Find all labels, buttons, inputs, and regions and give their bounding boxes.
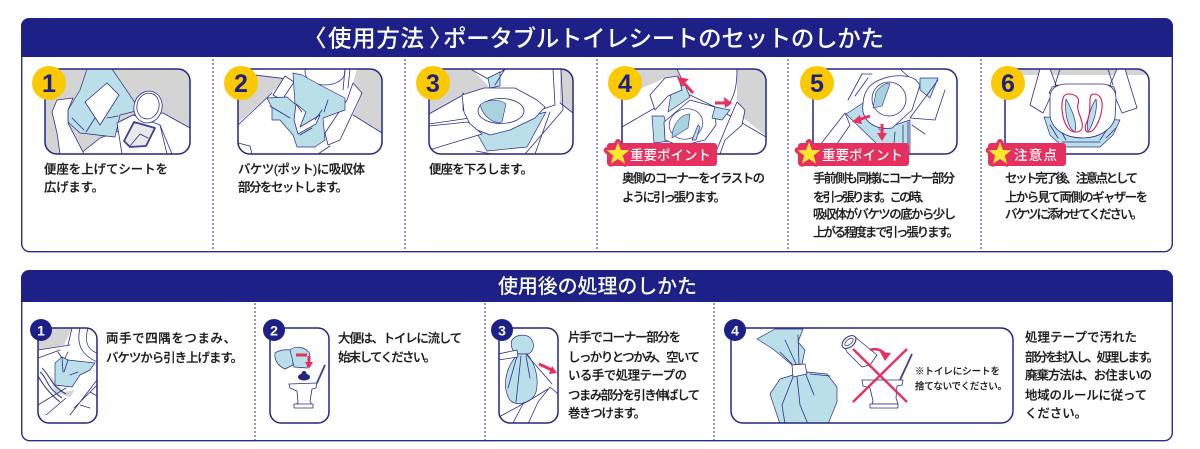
icon: red cross <box>853 349 907 402</box>
illustration: raising seat and spreading sheet <box>45 69 190 154</box>
heading bar: how to set the sheet: 使用方法 <box>328 26 424 52</box>
panel: disposal after use <box>21 270 1173 441</box>
callout: important point <box>607 142 717 166</box>
number badge 3: 3 <box>498 322 506 338</box>
callout: caution <box>988 142 1066 166</box>
heading bar: how to set the sheet: 〈 <box>303 26 326 52</box>
number badge 1 <box>30 319 52 341</box>
text: step 5: 上がる程度まで引っ張ります。 <box>813 224 959 240</box>
heading bar: disposal after use <box>21 270 1173 302</box>
heading bar: how to set the sheet: ポータブルトイレシートのセットのしかた <box>443 24 884 52</box>
text: step 3: 便座を下ろします。 <box>429 162 533 176</box>
number badge 4: 4 <box>731 322 739 338</box>
disposal step 3 <box>491 319 700 424</box>
step 3 <box>416 66 573 176</box>
disposal step 1 <box>30 319 243 423</box>
callout: important point <box>798 142 909 166</box>
text: step 5: を引っ張ります。この時、 <box>813 190 931 204</box>
panel: how to set the sheet <box>21 18 1173 252</box>
icon: sheet roll <box>840 333 891 367</box>
text: disposal step 3: 片手でコーナー部分を <box>568 330 681 344</box>
illustration: lifting sheet from bucket <box>38 328 97 423</box>
text: step 4: ように引っ張ります。 <box>622 190 726 204</box>
text: disposal step 4: ください。 <box>1025 406 1087 420</box>
number badge 3 <box>491 319 513 341</box>
text: disposal step 3: 巻きつけます。 <box>568 406 646 420</box>
text: disposal step 4: 廃棄方法は、お住まいの <box>1025 368 1152 382</box>
number badge 2 <box>224 66 258 100</box>
text: disposal step 2: 大便は、トイレに流して <box>338 332 462 346</box>
text: disposal step 1: バケツから引き上げます。 <box>106 351 243 365</box>
disposal step 4 <box>724 319 1159 424</box>
number badge 1 <box>32 66 66 100</box>
text: step 1: 便座を上げてシートを <box>44 162 168 176</box>
disposal step 2 <box>263 319 462 423</box>
callout: important point: 重要ポイント <box>630 148 711 163</box>
text: step 4: 奥側のコーナーをイラストの <box>622 170 765 186</box>
number badge 6: 6 <box>1001 70 1015 98</box>
number badge 3 <box>416 66 450 100</box>
note: do not flush sheet <box>915 366 1007 392</box>
text: disposal step 4 <box>1025 330 1159 420</box>
text: step 6: バケツに添わせてください。 <box>1005 208 1143 222</box>
number badge 1: 1 <box>42 70 56 98</box>
callout: important point: 重要ポイント <box>822 148 903 163</box>
text: step 1: 広げます。 <box>44 180 104 194</box>
icon: toilet <box>862 354 912 408</box>
text: disposal step 2 <box>338 332 462 364</box>
text: step 5 <box>813 170 959 240</box>
illustration: checking gathers from above <box>1005 69 1150 154</box>
number badge 2 <box>263 319 285 341</box>
text: step 6: セット完了後、注意点として <box>1005 170 1138 186</box>
illustration: pulling the far corners <box>622 69 766 154</box>
text: step 5: 手前側も同様にコーナー部分 <box>813 170 956 186</box>
number badge 4: 4 <box>618 70 632 98</box>
heading bar: disposal after use: 使用後の処理のしかた <box>498 275 697 298</box>
heading bar: how to set the sheet <box>21 18 1173 57</box>
illustration: setting absorbent in bucket <box>238 59 382 154</box>
illustration: wrapping with disposal tape <box>498 328 558 424</box>
text: disposal step 3: しっかりとつかみ、空いて <box>568 350 700 364</box>
step 6 <box>988 66 1150 222</box>
text: disposal step 4: 地域のルールに従って <box>1025 388 1147 402</box>
text: step 4 <box>622 170 765 204</box>
illustration: pulling the near corners <box>813 69 957 154</box>
text: disposal step 3: いる手で処理テープの <box>568 368 687 382</box>
heading bar: how to set the sheet: 〉 <box>429 26 452 52</box>
illustration: flushing solid waste <box>270 328 329 423</box>
number badge 2: 2 <box>234 70 248 98</box>
step 5 <box>798 66 959 240</box>
text: step 6: 上から見て両側のギャザーを <box>1005 190 1148 204</box>
icon: tied bag <box>757 329 837 424</box>
step 1 <box>32 66 190 194</box>
number badge 6 <box>991 66 1025 100</box>
text: disposal step 1 <box>106 330 243 365</box>
note: do not flush sheet: ※トイレにシートを <box>915 366 1000 378</box>
number badge 1: 1 <box>37 322 45 338</box>
number badge 4 <box>724 319 746 341</box>
text: step 5: 吸収体がバケツの底から少し <box>813 206 956 222</box>
text: disposal step 3: つまみ部分を引き伸ばして <box>568 388 700 402</box>
number badge 5: 5 <box>810 70 824 98</box>
text: disposal step 3 <box>568 330 700 420</box>
number badge 3: 3 <box>426 70 440 98</box>
number badge 2: 2 <box>270 322 278 338</box>
text: disposal step 4: 部分を封入し、処理します。 <box>1025 350 1159 364</box>
step 4 <box>607 66 766 204</box>
text: step 2: 部分をセットします。 <box>238 180 348 194</box>
text: step 6 <box>1005 170 1148 222</box>
illustration: lowering the seat <box>429 69 573 154</box>
step 2 <box>224 59 382 194</box>
callout: caution: 注意点 <box>1014 147 1057 163</box>
text: step 2 <box>238 162 366 194</box>
text: disposal step 4: 処理テープで汚れた <box>1025 330 1137 344</box>
number badge 4 <box>608 66 642 100</box>
text: disposal step 1: 両手で四隅をつまみ、 <box>106 330 236 346</box>
text: disposal step 2: 始末してください。 <box>338 350 436 364</box>
illustration: tied bag and no-flush warning <box>731 328 1013 424</box>
text: step 2: バケツ(ポット)に吸収体 <box>238 162 366 176</box>
note: do not flush sheet: 捨てないでください。 <box>915 380 1007 392</box>
number badge 5 <box>800 66 834 100</box>
text: step 1 <box>44 162 168 194</box>
